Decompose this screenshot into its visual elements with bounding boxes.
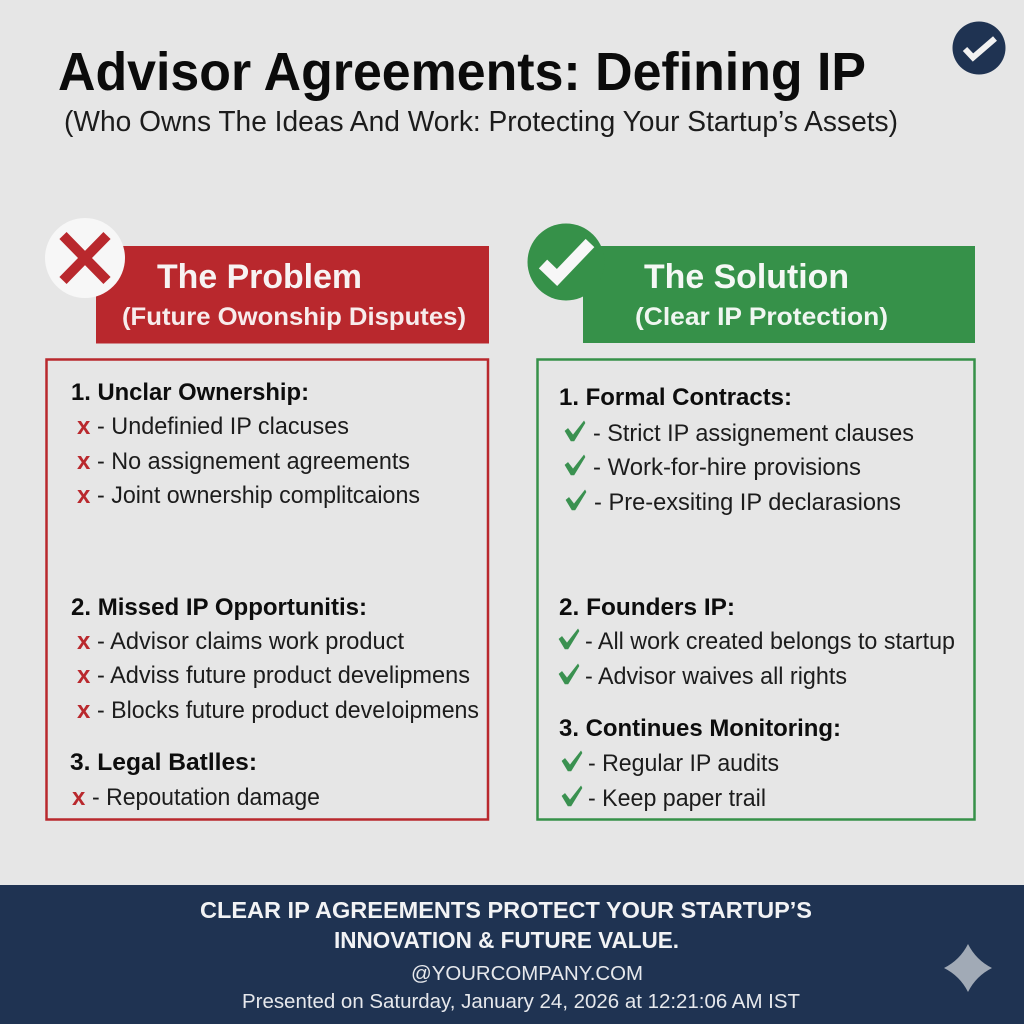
- icon: sparkle star: [944, 944, 992, 992]
- footer message: INNOVATION & FUTURE VALUE.: [334, 927, 679, 953]
- section: continuous monitoring: - Regular IP audits: [588, 750, 779, 777]
- section: unclear ownership: 1. Unclar Ownership:: [71, 379, 309, 406]
- section: unclear ownership: - Undefinied IP clacuses: [97, 413, 349, 440]
- section: continuous monitoring: [559, 715, 841, 812]
- footer message: CLEAR IP AGREEMENTS PROTECT YOUR STARTUP’S: [200, 897, 812, 923]
- section: missed ip opportunities: x: [77, 697, 91, 724]
- section: missed ip opportunities: x: [77, 662, 91, 689]
- section: founders ip: 2. Founders IP:: [559, 594, 735, 621]
- section: unclear ownership: - No assignement agreements: [97, 448, 410, 475]
- section: missed ip opportunities: [71, 594, 479, 724]
- section: founders ip: - Advisor waives all rights: [585, 663, 847, 690]
- section: continuous monitoring: 3. Continues Monitoring:: [559, 715, 841, 742]
- section: legal battles: - Repoutation damage: [92, 784, 320, 811]
- section: missed ip opportunities: - Advisor claims work product: [97, 628, 404, 655]
- section: legal battles: [70, 749, 320, 811]
- subheading: clear ip protection: (Clear IP Protection): [635, 303, 888, 331]
- section: unclear ownership: x: [77, 413, 91, 440]
- icon: green check: [528, 224, 604, 300]
- panel: problem list: [46, 360, 488, 820]
- footer band: [0, 885, 1024, 1024]
- section: missed ip opportunities: - Blocks future product deveIoipmens: [97, 697, 479, 724]
- section: legal battles: 3. Legal Batlles:: [70, 749, 257, 776]
- section: missed ip opportunities: 2. Missed IP Opportunitis:: [71, 594, 367, 621]
- footer message: [200, 897, 812, 953]
- section: formal contracts: - Strict IP assignement clauses: [593, 420, 914, 447]
- panel header: the problem: [45, 218, 489, 344]
- section: founders ip: - All work created belongs to startup: [585, 628, 955, 655]
- section: formal contracts: - Work-for-hire provisions: [593, 454, 861, 481]
- subtitle: (Who Owns The Ideas And Work: Protecting Your Startup’s Assets): [64, 106, 898, 138]
- section: legal battles: x: [72, 784, 86, 811]
- heading: the solution: The Solution: [644, 258, 849, 296]
- section: unclear ownership: - Joint ownership complitcaions: [97, 482, 420, 509]
- section: founders ip: [559, 594, 955, 690]
- footer date line: Presented on Saturday, January 24, 2026 at 12:21:06 AM IST: [242, 991, 800, 1013]
- footer website: @YOURCOMPANY.COM: [411, 963, 643, 985]
- subheading: future ownership disputes: (Future Owonship Disputes): [122, 303, 466, 331]
- icon: red cross: [45, 218, 125, 298]
- title: Advisor Agreements: Defining IP: [58, 42, 866, 102]
- section: formal contracts: 1. Formal Contracts:: [559, 384, 792, 411]
- panel: solution list: [538, 360, 974, 820]
- section: missed ip opportunities: x: [77, 628, 91, 655]
- section: missed ip opportunities: - Adviss future product develipmens: [97, 662, 470, 689]
- section: unclear ownership: x: [77, 448, 91, 475]
- section: formal contracts: [559, 384, 914, 516]
- section: continuous monitoring: - Keep paper trail: [588, 785, 766, 812]
- heading: the problem: The Problem: [157, 258, 362, 296]
- icon: navy check badge: [952, 22, 1006, 74]
- panel header: the solution: [528, 224, 975, 343]
- section: unclear ownership: [71, 379, 420, 509]
- section: unclear ownership: x: [77, 482, 91, 509]
- section: formal contracts: - Pre-exsiting IP declarasions: [594, 489, 901, 516]
